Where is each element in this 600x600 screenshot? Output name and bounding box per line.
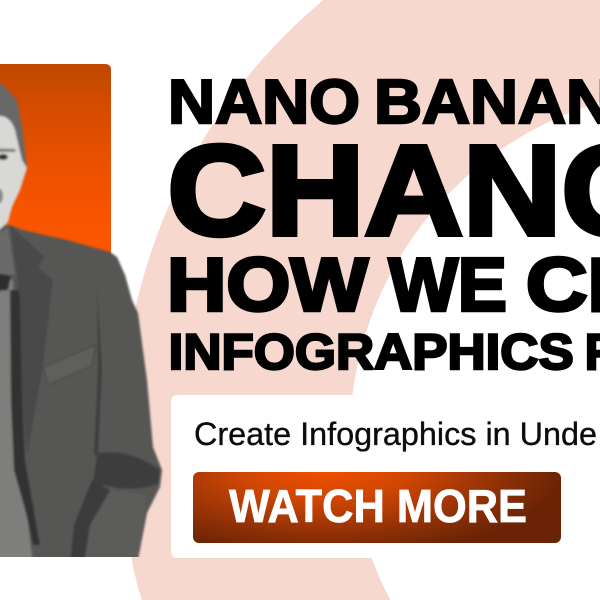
panel: orange photo backdrop xyxy=(0,64,111,275)
mouth shadow xyxy=(0,189,3,203)
dark pocket opening xyxy=(70,480,110,557)
jacket silhouette xyxy=(0,225,162,565)
tie knot xyxy=(0,272,11,292)
button: watch more: WATCH MORE xyxy=(229,480,527,532)
hair xyxy=(0,78,27,175)
headline line 4 xyxy=(170,332,600,371)
headline line 1: NANO xyxy=(168,68,360,137)
headline line 3: HOW xyxy=(167,242,368,326)
sleeve fold xyxy=(93,452,160,489)
lower sleeve xyxy=(84,490,147,565)
headline line 1: BANAN xyxy=(374,68,600,137)
lapel xyxy=(10,225,53,457)
shadow between shirt and jacket xyxy=(10,290,40,545)
shirt collar xyxy=(0,228,15,275)
headline line 1 xyxy=(171,78,600,125)
panel: call to action xyxy=(171,395,600,558)
button: watch more xyxy=(193,472,561,543)
headline line 3 xyxy=(170,256,600,313)
chest pocket xyxy=(46,346,96,382)
headline line 4: INFOGRAPHICS xyxy=(169,323,574,380)
face xyxy=(0,116,27,240)
headline line 3: WE xyxy=(389,242,507,326)
eyebrow xyxy=(0,148,16,152)
white card xyxy=(171,395,600,558)
subheading: Create Infographics in Unde xyxy=(194,416,597,452)
sleeve crease xyxy=(94,285,102,455)
background ring xyxy=(122,0,600,600)
headline xyxy=(167,68,600,380)
eye xyxy=(0,154,8,160)
man in grey suit xyxy=(0,78,162,565)
shirt xyxy=(0,275,33,565)
